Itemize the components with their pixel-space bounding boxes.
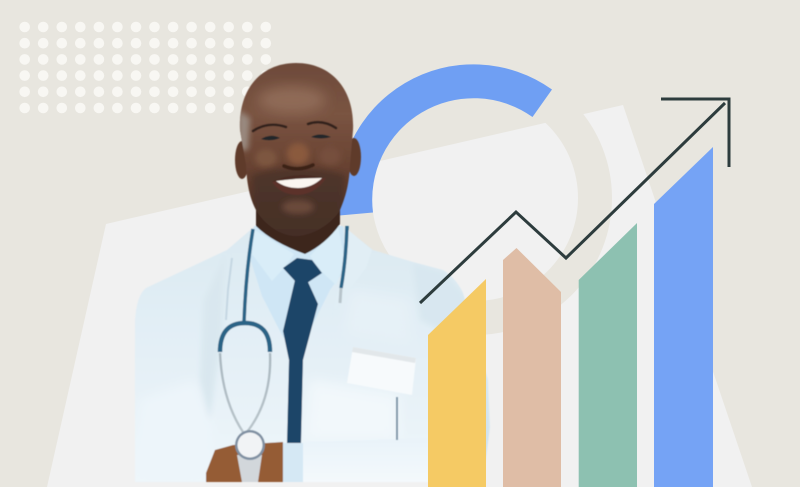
shirt cuff xyxy=(283,443,303,482)
yellow bar xyxy=(428,279,486,487)
upper lip xyxy=(271,175,326,182)
blue yoke xyxy=(220,323,270,352)
dot grid xyxy=(19,22,271,113)
cheek highlights xyxy=(255,149,277,167)
trend arrow xyxy=(420,99,729,303)
pocket seam xyxy=(396,397,398,440)
teeth xyxy=(276,178,322,188)
bar chart xyxy=(428,147,713,487)
neck xyxy=(256,200,340,254)
head xyxy=(239,62,354,236)
earpiece xyxy=(340,288,341,303)
tie blade xyxy=(283,280,318,443)
beard shadow xyxy=(252,167,346,212)
green bar xyxy=(579,223,637,487)
brows xyxy=(253,122,336,131)
peach bar xyxy=(503,248,561,487)
trend line xyxy=(420,103,725,303)
blue arc xyxy=(339,64,552,216)
stethoscope xyxy=(220,226,347,432)
temple grey xyxy=(238,110,250,150)
beige ring cut through backdrop xyxy=(355,78,595,318)
name badge xyxy=(347,347,416,395)
doctor xyxy=(135,60,492,482)
forearm xyxy=(206,442,283,482)
collar right xyxy=(310,226,345,285)
arrow head xyxy=(661,99,729,167)
chin highlight xyxy=(282,200,314,214)
coat crossed arm xyxy=(303,438,428,482)
light backdrop shape xyxy=(47,105,752,487)
nose xyxy=(284,143,313,169)
ears xyxy=(235,138,361,179)
coat shading and folds xyxy=(135,255,492,482)
tie xyxy=(283,258,322,443)
coat lapel right xyxy=(334,228,372,310)
lower lip xyxy=(272,178,326,195)
collar left xyxy=(252,230,294,281)
silver tubes xyxy=(220,353,270,432)
wristwatch xyxy=(235,430,265,482)
lab coat xyxy=(135,226,490,482)
eyes xyxy=(261,134,331,140)
left tube xyxy=(244,229,253,322)
right tube xyxy=(341,226,347,288)
tie knot xyxy=(283,258,322,283)
forehead highlight xyxy=(258,86,326,114)
blue bar xyxy=(654,147,713,487)
shirt xyxy=(250,226,346,350)
